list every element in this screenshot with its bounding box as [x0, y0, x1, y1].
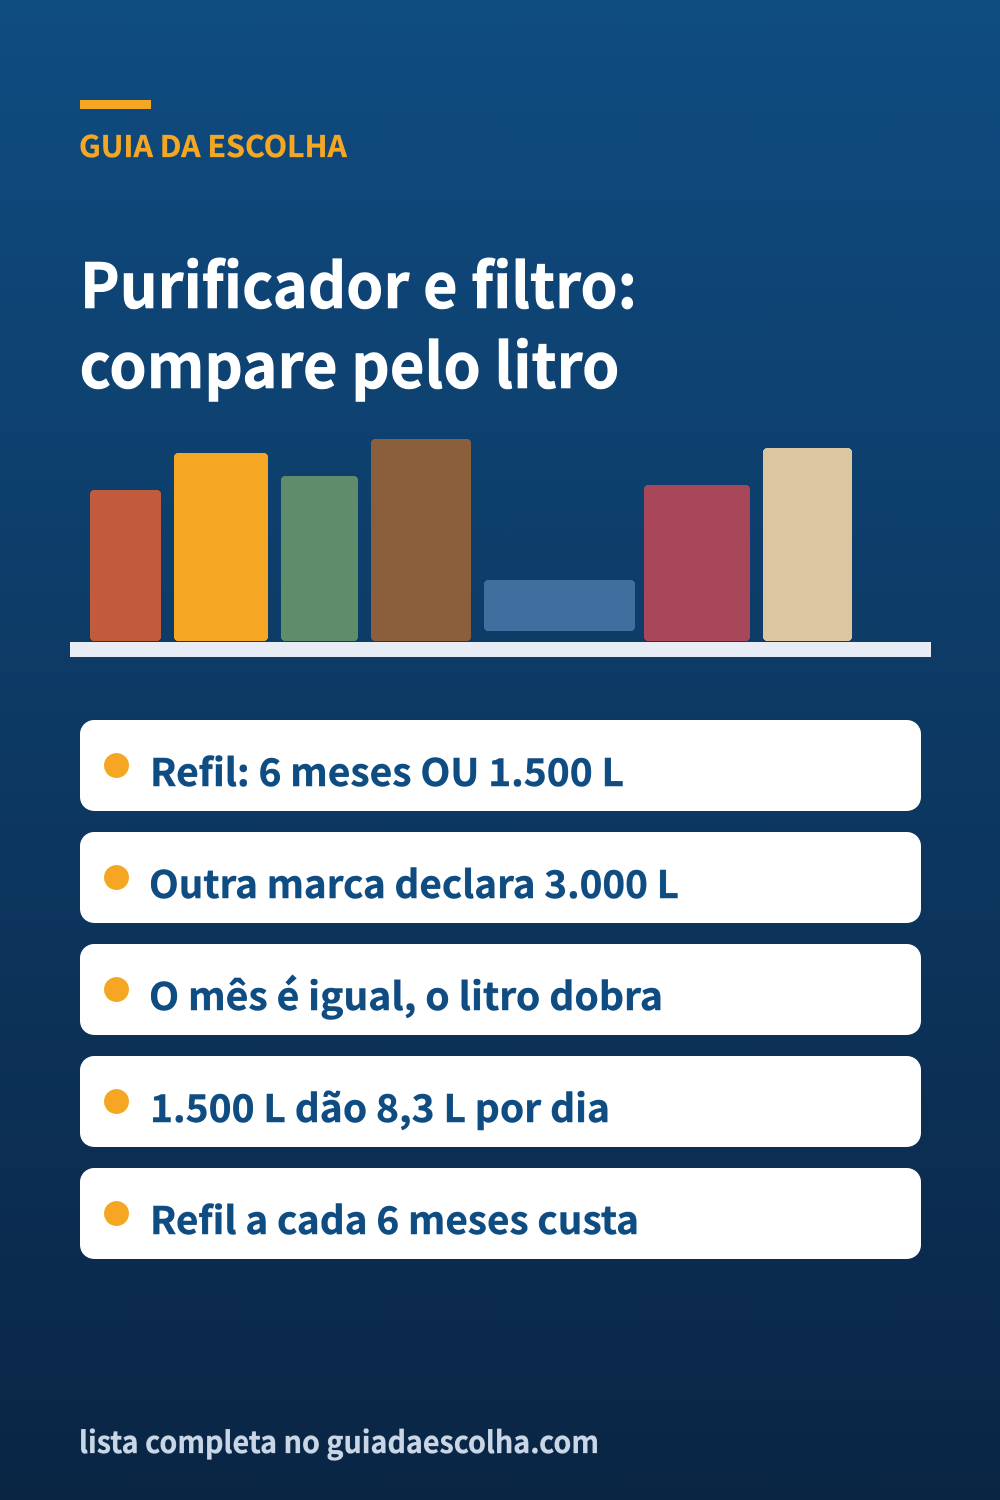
list item 1	[80, 720, 921, 811]
title: compare pelo litro	[80, 316, 620, 406]
accent bar	[80, 100, 151, 109]
list item 1: Refil: 6 meses OU 1.500 L	[150, 742, 624, 797]
list item 3	[80, 944, 921, 1035]
list item 5	[80, 1168, 921, 1259]
title: Purificador e filtro:	[80, 236, 637, 326]
footer: lista completa no guiadaescolha.com	[79, 1418, 599, 1462]
bar: orange	[174, 453, 268, 641]
list item 2: Outra marca declara 3.000 L	[149, 854, 679, 909]
list item 3: O mês é igual, o litro dobra	[149, 966, 663, 1021]
list item 2	[80, 832, 921, 923]
bar: brown	[371, 439, 471, 641]
shelf	[70, 642, 931, 657]
bar: crimson	[644, 485, 750, 641]
bar: beige	[763, 448, 852, 641]
bar: green	[281, 476, 358, 641]
list item 5: Refil a cada 6 meses custa	[150, 1190, 639, 1245]
chart: bars on a shelf	[70, 439, 931, 657]
eyebrow label: GUIA DA ESCOLHA	[79, 122, 348, 166]
list item 4	[80, 1056, 921, 1147]
bar: red	[90, 490, 161, 641]
bar: blue	[484, 580, 635, 631]
title	[80, 236, 637, 406]
list item 4: 1.500 L dão 8,3 L por dia	[150, 1078, 610, 1133]
